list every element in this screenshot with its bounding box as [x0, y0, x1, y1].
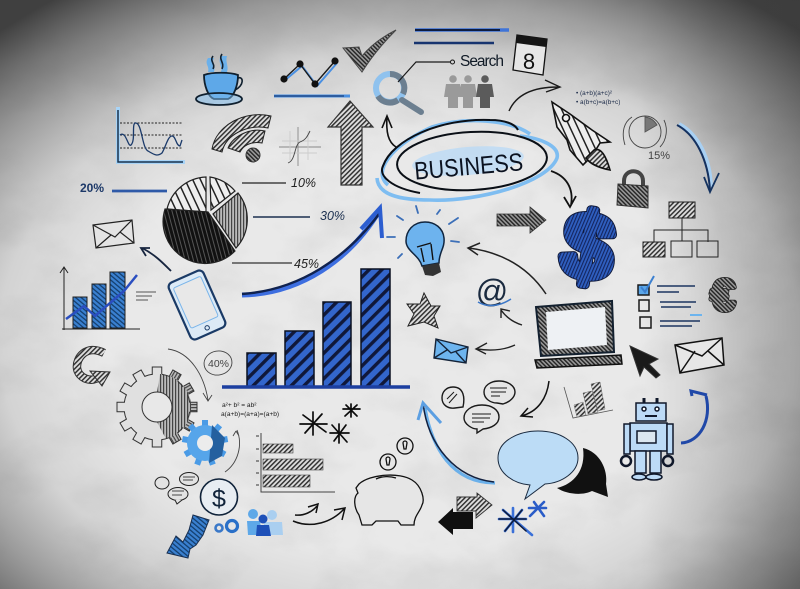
black left arrow [438, 508, 473, 535]
icon: padlock [617, 171, 648, 208]
icon: dollar coin: $ [212, 485, 226, 513]
icon: dollar sign: $ [555, 193, 620, 301]
pie percent labels: 30% [320, 209, 345, 223]
icon: wifi signal [212, 115, 271, 162]
icon: coffee cup [196, 54, 242, 105]
arc arrow with 40 percent [168, 349, 234, 401]
icon: G refresh arrow [77, 350, 110, 386]
arc arrow with 40 percent: 40% [208, 358, 229, 370]
icon: calendar: 8 [523, 49, 535, 74]
arrow to blue envelope [476, 343, 515, 354]
checklist [638, 276, 702, 328]
search label: Search [460, 53, 504, 70]
icon: blue gear [182, 420, 228, 466]
big blue trend arrow [242, 208, 382, 295]
pie percent labels: 20% [80, 181, 104, 195]
formula under chart: a²+ b² = ab² [222, 402, 257, 409]
icon: rocket [552, 102, 610, 170]
blue stars [499, 502, 546, 535]
icon: smartphone [167, 269, 227, 341]
arrow from laptop to bulb [468, 243, 546, 294]
formula under chart: a(a+b)=(a+a)=(a+b) [221, 411, 279, 418]
pie percent labels [80, 176, 345, 271]
small bar chart left [60, 267, 156, 330]
icon: cursor [630, 346, 660, 378]
blue down arrow [167, 515, 209, 558]
small curved arrows [293, 504, 345, 524]
arrow phone to envelope [141, 248, 171, 271]
arrow from laptop to bubbles [521, 381, 549, 417]
icon: star [407, 293, 440, 328]
horizontal bar chart [256, 433, 335, 492]
icon: light bulb [387, 206, 459, 276]
pie percent labels: 10% [291, 176, 316, 190]
panel: line graph left [118, 107, 185, 162]
arrow to dollar [551, 171, 576, 207]
business oval heading [377, 120, 557, 200]
math plot [279, 127, 321, 166]
formula under chart [221, 402, 279, 418]
top decorative lines [414, 30, 509, 43]
icon: dollar sign: $ [555, 193, 620, 301]
arrow to rocket [509, 80, 560, 111]
formula text: • a(b+c)=a(b+c) [576, 99, 620, 106]
gray right arrow [497, 207, 546, 233]
icon: blue people group [247, 509, 283, 536]
icon: envelope right [675, 338, 724, 373]
icon: magnifier search [376, 60, 454, 112]
pie chart [163, 177, 247, 264]
icon: at sign: @ [476, 273, 508, 309]
bar chart main [222, 269, 410, 387]
black stars [300, 404, 360, 443]
blue arrow down [677, 124, 719, 192]
large speech bubble black [557, 448, 608, 497]
icon: dollar coin [200, 479, 238, 515]
formula text: • (a+b)(a+c)² [576, 90, 612, 97]
speech bubbles small right [442, 381, 515, 433]
icon: gauge 15 percent [623, 116, 670, 162]
icon: blue envelope [434, 339, 468, 363]
small gray chart [564, 382, 613, 418]
icon: laptop [535, 301, 622, 368]
icon: calendar [513, 35, 547, 75]
business oval heading: BUSINESS [413, 148, 524, 186]
blue curved arrow by robot [681, 391, 708, 443]
pie percent labels: 45% [294, 257, 319, 271]
blue arrow to bubbles [418, 403, 495, 483]
icon: robot [621, 398, 673, 480]
icon: three people [444, 75, 494, 108]
icon: euro sign: € [711, 271, 735, 320]
icon: check mark [343, 30, 396, 72]
large speech bubble blue [498, 431, 578, 499]
icon: gauge 15 percent: 15% [648, 150, 670, 162]
formula text [576, 90, 620, 106]
icon: euro sign: € [711, 271, 735, 320]
icon: envelope left [93, 220, 134, 248]
arc arrow by blue gear [225, 430, 240, 472]
org chart [643, 202, 718, 257]
icon: large gear [117, 367, 197, 447]
icon: piggy bank [355, 438, 423, 525]
gray up arrow [328, 101, 373, 185]
small blue gears [216, 520, 238, 532]
line chart with dots [274, 57, 350, 96]
speech bubbles small left [155, 472, 198, 504]
arrow to at sign [501, 309, 522, 325]
small black up arrow to magnifier [382, 116, 396, 147]
striped right arrow [457, 493, 492, 518]
